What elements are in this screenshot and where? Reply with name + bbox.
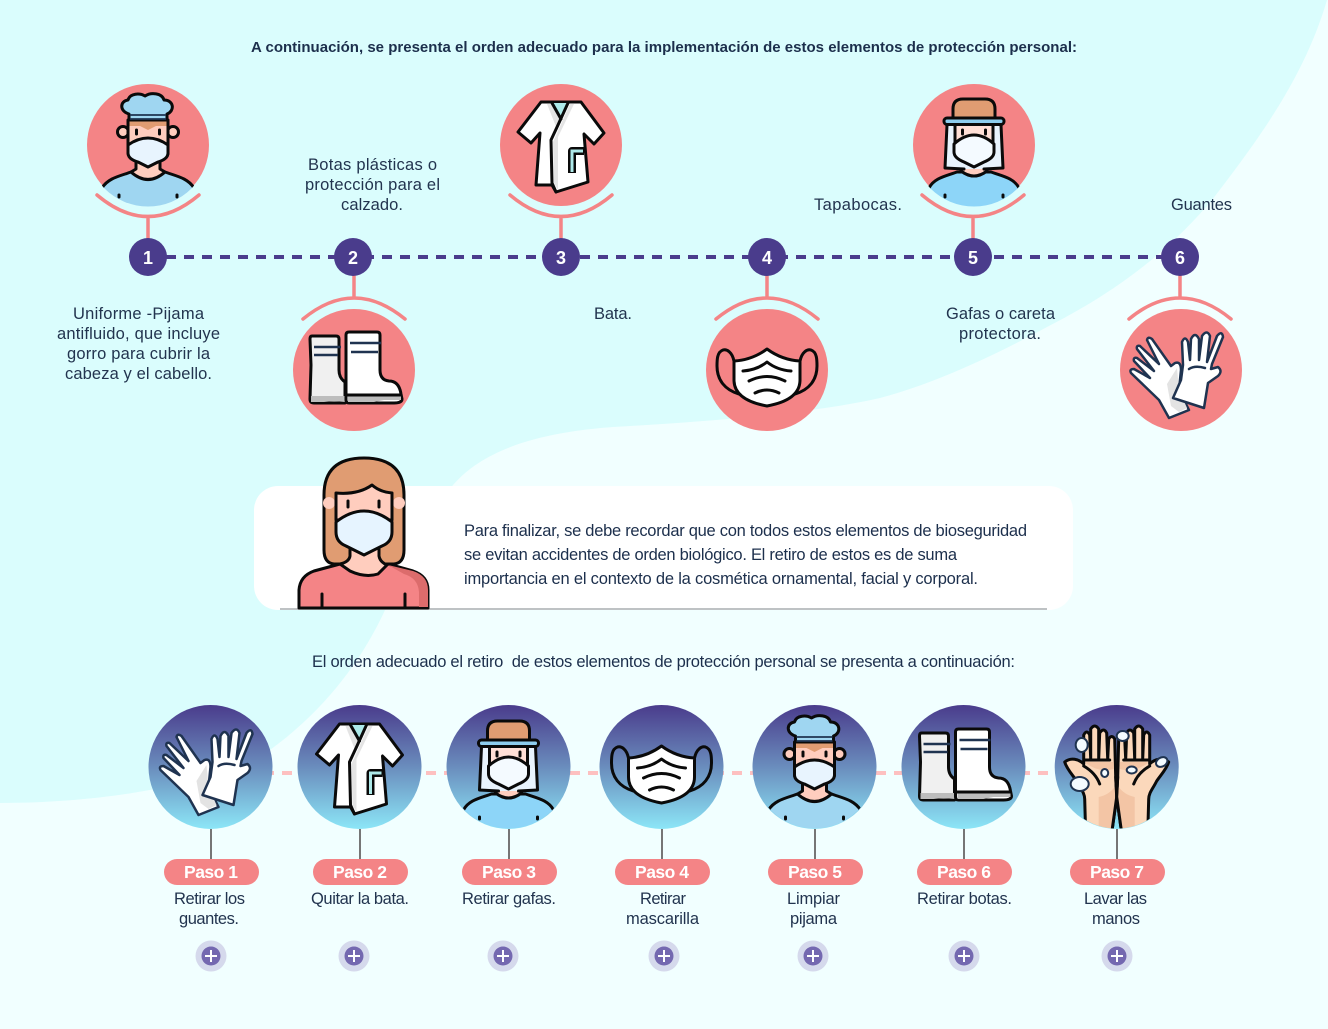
plus button bbox=[338, 940, 370, 972]
plus button bbox=[1102, 940, 1132, 972]
text: paso 7: Lavar las bbox=[1084, 890, 1147, 908]
panel: closing note bbox=[254, 458, 1073, 610]
text: closing paragraph: importancia en el contexto de la cosmética ornamental, facial y corporal. bbox=[464, 570, 978, 588]
background blob bbox=[0, 0, 1327, 803]
icon: gloves bbox=[1120, 309, 1242, 431]
text: paso 5: pijama bbox=[790, 910, 838, 928]
text: step 5: protectora. bbox=[959, 325, 1041, 343]
text: paso 2: Quitar la bata. bbox=[311, 890, 409, 908]
text: step 1: gorro para cubrir la bbox=[67, 345, 211, 363]
pill: paso 2: Paso 2 bbox=[333, 862, 387, 882]
pill: paso 2 bbox=[313, 859, 408, 885]
step card: paso 2 bbox=[298, 705, 422, 972]
title: A continuación, se presenta el orden adecuado para la implementación de estos elementos de protección personal: bbox=[251, 39, 1077, 56]
text: closing paragraph: se evitan accidentes de orden biológico. El retiro de estos es de suma bbox=[464, 546, 958, 564]
number badge 6 bbox=[1161, 238, 1199, 276]
pill: paso 5: Paso 5 bbox=[788, 862, 842, 882]
text: paso 4: Retirar bbox=[640, 890, 686, 908]
text: step 2: calzado. bbox=[341, 196, 403, 214]
plus button bbox=[648, 940, 680, 972]
pill: paso 1: Paso 1 bbox=[184, 862, 238, 882]
number badge 4 bbox=[748, 238, 786, 276]
text: paso 1: guantes. bbox=[179, 910, 239, 928]
step card: paso 6 bbox=[902, 705, 1026, 972]
heading: removal order: El orden adecuado el retiro de estos elementos de protección personal se presenta a continuación: bbox=[312, 653, 1015, 671]
text: step 1: cabeza y el cabello. bbox=[65, 365, 212, 383]
step card: paso 5 bbox=[752, 705, 876, 972]
plus button bbox=[948, 940, 980, 972]
pill: paso 4: Paso 4 bbox=[635, 862, 689, 882]
number badge 1 bbox=[129, 238, 167, 276]
step 1: uniform bbox=[57, 84, 220, 383]
number badge 1: 1 bbox=[143, 248, 153, 268]
text: step 4: Tapabocas. bbox=[814, 196, 902, 214]
step 3: gown bbox=[500, 84, 632, 323]
text: paso 4: mascarilla bbox=[626, 910, 700, 928]
pill: paso 6 bbox=[917, 859, 1012, 885]
icon: woman with mask bbox=[299, 458, 428, 608]
step card: paso 3 bbox=[446, 705, 570, 972]
number badge 3: 3 bbox=[556, 248, 566, 268]
text: paso 7: manos bbox=[1092, 910, 1140, 928]
icon: person in pajama and cap bbox=[87, 84, 209, 215]
pill: paso 1 bbox=[164, 859, 259, 885]
icon: face shield on gradient bbox=[446, 705, 570, 837]
text: step 6: Guantes bbox=[1171, 196, 1232, 214]
removal dashed connector bbox=[264, 771, 1060, 775]
plus button bbox=[196, 940, 226, 972]
icon: washing hands on gradient bbox=[1055, 705, 1179, 835]
step 4: face mask bbox=[706, 196, 902, 431]
icon: gown bbox=[500, 84, 622, 206]
pill: paso 5 bbox=[768, 859, 863, 885]
step 6: gloves bbox=[1120, 196, 1242, 431]
plus button bbox=[488, 940, 518, 972]
pill: paso 6: Paso 6 bbox=[937, 862, 991, 882]
text: step 1: antifluido, que incluye bbox=[57, 325, 220, 343]
icon: person on gradient bbox=[752, 705, 876, 837]
text: paso 1 bbox=[174, 890, 245, 928]
step 2: boots bbox=[293, 156, 440, 431]
text: paso 5 bbox=[787, 890, 840, 928]
step card: paso 7 bbox=[1055, 705, 1179, 972]
number badge 6: 6 bbox=[1175, 248, 1185, 268]
text: step 1 bbox=[57, 305, 220, 383]
timeline dashed line bbox=[166, 255, 1170, 259]
icon: boots bbox=[293, 309, 415, 431]
icon: face mask bbox=[706, 309, 828, 431]
pill: paso 7 bbox=[1070, 859, 1165, 885]
text: step 2 bbox=[305, 156, 440, 214]
number badge 2 bbox=[334, 238, 372, 276]
text: step 1: Uniforme -Pijama bbox=[73, 305, 205, 323]
number badge 5 bbox=[954, 238, 992, 276]
text: closing paragraph: Para finalizar, se debe recordar que con todos estos elementos de bioseguridad bbox=[464, 522, 1027, 540]
text: paso 1: Retirar los bbox=[174, 890, 245, 908]
text: paso 6: Retirar botas. bbox=[917, 890, 1012, 908]
pill: paso 7: Paso 7 bbox=[1090, 862, 1144, 882]
plus button bbox=[798, 940, 828, 972]
pill: paso 3: Paso 3 bbox=[482, 862, 536, 882]
step card: paso 1 bbox=[148, 705, 272, 972]
icon: gown on gradient bbox=[298, 705, 422, 829]
icon: person with face shield bbox=[913, 84, 1035, 215]
text: step 5 bbox=[946, 305, 1056, 343]
text: closing paragraph bbox=[464, 522, 1027, 588]
text: step 2: Botas plásticas o bbox=[308, 156, 437, 174]
text: paso 7 bbox=[1084, 890, 1147, 928]
step card: paso 4 bbox=[600, 705, 724, 972]
text: paso 4 bbox=[626, 890, 700, 928]
number badge 5: 5 bbox=[968, 248, 978, 268]
pill: paso 4 bbox=[615, 859, 710, 885]
pill: paso 3 bbox=[462, 859, 557, 885]
text: step 5: Gafas o careta bbox=[946, 305, 1056, 323]
step 5: face shield bbox=[913, 84, 1056, 343]
text: step 2: protección para el bbox=[305, 176, 440, 194]
icon: mask on gradient bbox=[600, 705, 724, 829]
text: paso 5: Limpiar bbox=[787, 890, 840, 908]
number badge 2: 2 bbox=[348, 248, 358, 268]
icon: boots on gradient bbox=[902, 705, 1026, 829]
number badge 3 bbox=[542, 238, 580, 276]
number badge 4: 4 bbox=[762, 248, 772, 268]
text: paso 3: Retirar gafas. bbox=[462, 890, 556, 908]
icon: gloves on gradient bbox=[148, 705, 272, 829]
text: step 3: Bata. bbox=[594, 305, 632, 323]
